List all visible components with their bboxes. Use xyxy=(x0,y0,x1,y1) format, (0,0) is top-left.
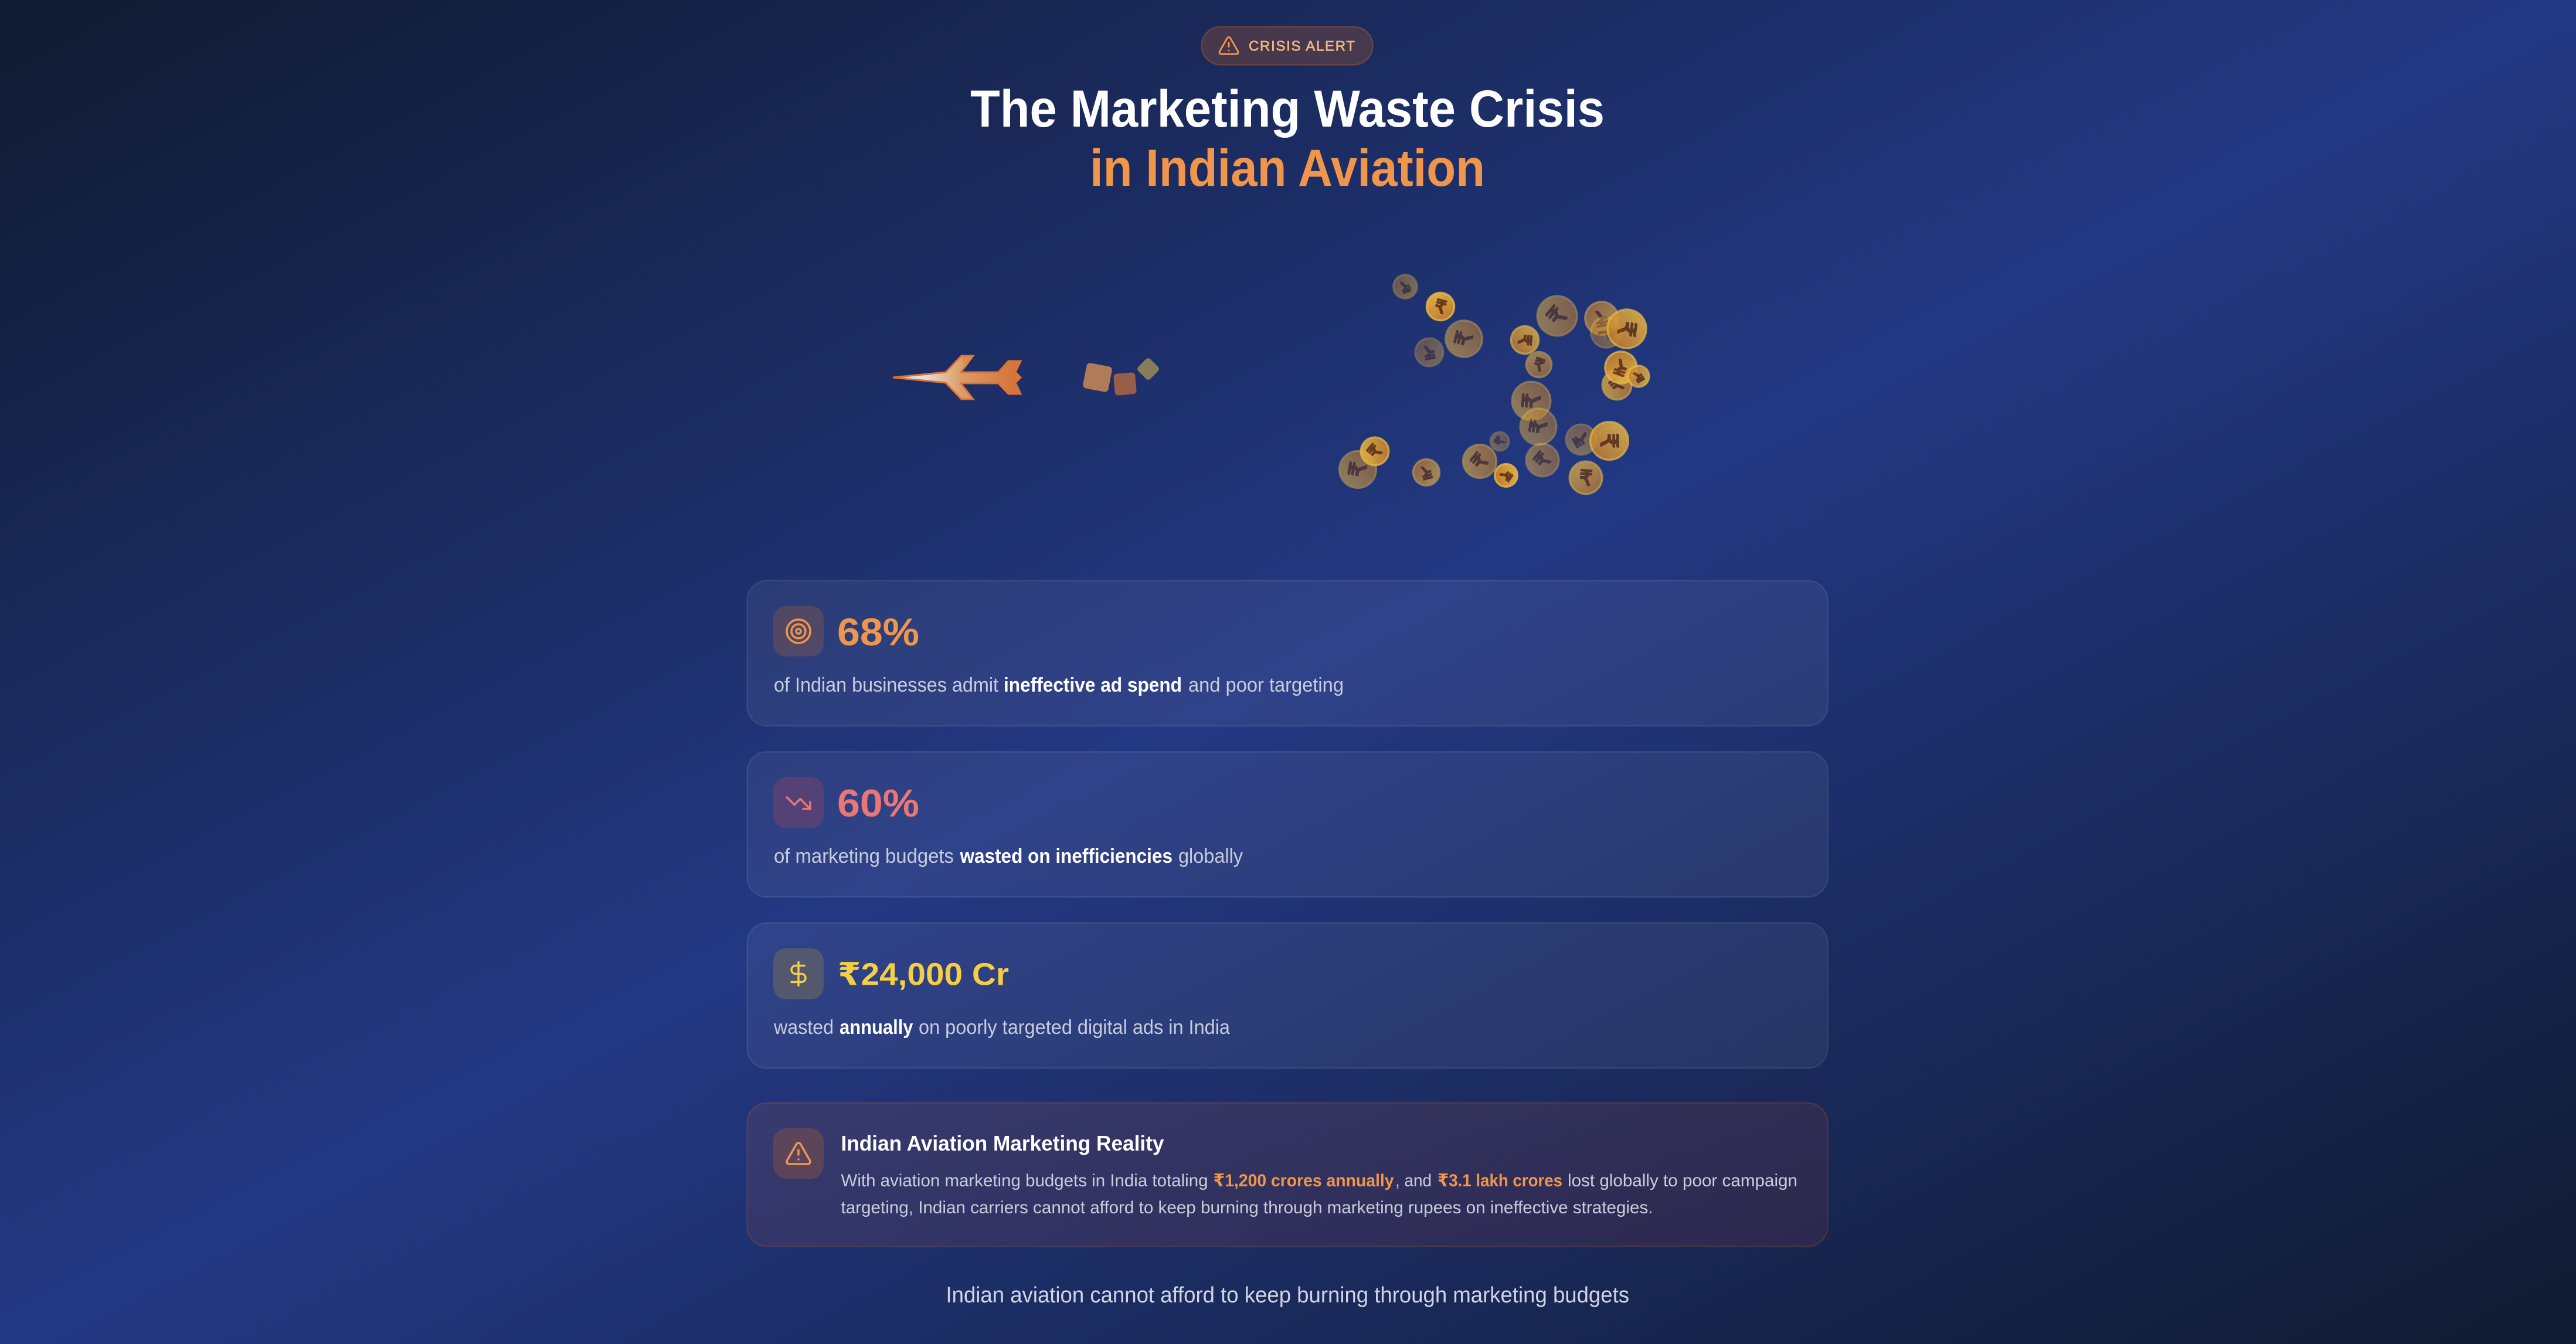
stat description: and poor targeting xyxy=(1188,674,1344,696)
coin: ₹ xyxy=(1514,334,1535,346)
icon: trending down xyxy=(773,777,824,828)
callout body text: targeting, Indian carriers cannot afford to keep burning through marketing rupees on ineffective strategies. xyxy=(841,1198,1653,1217)
coin: ₹ xyxy=(1578,466,1593,490)
icon: target xyxy=(773,606,824,656)
coin xyxy=(1510,325,1540,355)
coin: ₹ xyxy=(1517,392,1546,410)
stat description xyxy=(773,1016,1230,1039)
title: The Marketing Waste Crisis xyxy=(970,79,1605,138)
coin: ₹ xyxy=(1531,354,1547,375)
coin: ₹ xyxy=(1496,467,1515,484)
coin: ₹ xyxy=(1593,322,1618,342)
icon: dollar sign xyxy=(773,948,824,999)
stat description: wasted xyxy=(773,1016,834,1039)
coin xyxy=(1442,317,1486,361)
coin xyxy=(1600,347,1642,388)
stat value: ₹24,000 Cr xyxy=(838,957,1009,992)
coin: ₹ xyxy=(1398,277,1413,297)
icon: warning triangle xyxy=(1219,38,1238,54)
panel: Indian aviation marketing reality callout xyxy=(747,1103,1828,1246)
panel: 68% stat xyxy=(747,580,1828,726)
coin xyxy=(1624,362,1653,391)
footer statement: Indian aviation cannot afford to keep burning through marketing budgets xyxy=(946,1283,1629,1308)
burning debris squares xyxy=(1082,357,1160,396)
coin xyxy=(1530,288,1585,343)
coin: ₹ xyxy=(1364,440,1386,462)
badge label: CRISIS ALERT xyxy=(1249,39,1355,54)
coin xyxy=(1413,336,1445,368)
coin: ₹ xyxy=(1606,373,1628,397)
coin xyxy=(1390,271,1420,302)
panel: 24,000 crore stat xyxy=(747,923,1828,1068)
coin xyxy=(1523,348,1555,381)
coin xyxy=(1517,406,1559,448)
coin: ₹ xyxy=(1542,301,1574,332)
coin xyxy=(1561,419,1602,460)
stat description: wasted on inefficiencies xyxy=(960,845,1173,867)
title: in Indian Aviation xyxy=(1090,138,1485,197)
falling rupee coins xyxy=(1337,271,1653,495)
coin: ₹ xyxy=(1422,341,1437,363)
panel: 60% stat xyxy=(747,751,1828,897)
coin: ₹ xyxy=(1432,296,1449,318)
stat description: of marketing budgets xyxy=(774,845,954,867)
stat description xyxy=(774,674,1344,696)
stat description xyxy=(774,845,1243,867)
coin xyxy=(1337,448,1379,491)
stat description: of Indian businesses admit xyxy=(774,674,999,696)
coin xyxy=(1456,438,1503,485)
coin: ₹ xyxy=(1419,461,1434,482)
coin xyxy=(1511,380,1552,421)
coin: ₹ xyxy=(1630,367,1646,385)
icon: warning triangle xyxy=(773,1128,824,1179)
stat description: globally xyxy=(1178,845,1243,867)
coin: ₹ xyxy=(1530,448,1556,473)
coin xyxy=(1568,460,1603,495)
coin xyxy=(1490,460,1522,491)
coin: ₹ xyxy=(1450,328,1479,349)
coin xyxy=(1596,365,1637,406)
coin: ₹ xyxy=(1492,434,1508,449)
coin: ₹ xyxy=(1569,428,1594,450)
coin xyxy=(1583,300,1620,337)
coin xyxy=(1591,422,1628,460)
coin: ₹ xyxy=(1344,460,1372,479)
coin xyxy=(1355,432,1394,471)
callout body text: , and xyxy=(1395,1171,1432,1190)
stat value: 60% xyxy=(837,781,919,825)
coin xyxy=(1487,428,1513,454)
coin: ₹ xyxy=(1612,319,1642,338)
stat description: annually xyxy=(840,1016,913,1039)
coin: ₹ xyxy=(1466,448,1493,474)
coin xyxy=(1411,457,1442,488)
crisis alert badge xyxy=(1202,27,1373,64)
coin xyxy=(1587,313,1626,352)
coin: ₹ xyxy=(1596,433,1623,448)
coin: ₹ xyxy=(1593,305,1610,331)
stat description: on poorly targeted digital ads in India xyxy=(919,1016,1230,1039)
stat value: 68% xyxy=(837,610,919,654)
callout body text: With aviation marketing budgets in India totaling xyxy=(841,1171,1208,1190)
icon: airplane xyxy=(893,356,1021,399)
callout body text xyxy=(841,1171,1797,1217)
coin: ₹ xyxy=(1611,354,1631,380)
callout body text: ₹1,200 crores annually xyxy=(1214,1171,1394,1190)
callout body text: lost globally to poor campaign xyxy=(1568,1171,1797,1190)
coin: ₹ xyxy=(1525,417,1553,436)
coin xyxy=(1520,437,1565,483)
coin xyxy=(1605,307,1649,351)
stat description: ineffective ad spend xyxy=(1004,674,1182,696)
callout body text: ₹3.1 lakh crores xyxy=(1437,1171,1562,1190)
coin xyxy=(1423,290,1457,324)
callout heading: Indian Aviation Marketing Reality xyxy=(841,1131,1164,1155)
title xyxy=(970,79,1605,197)
